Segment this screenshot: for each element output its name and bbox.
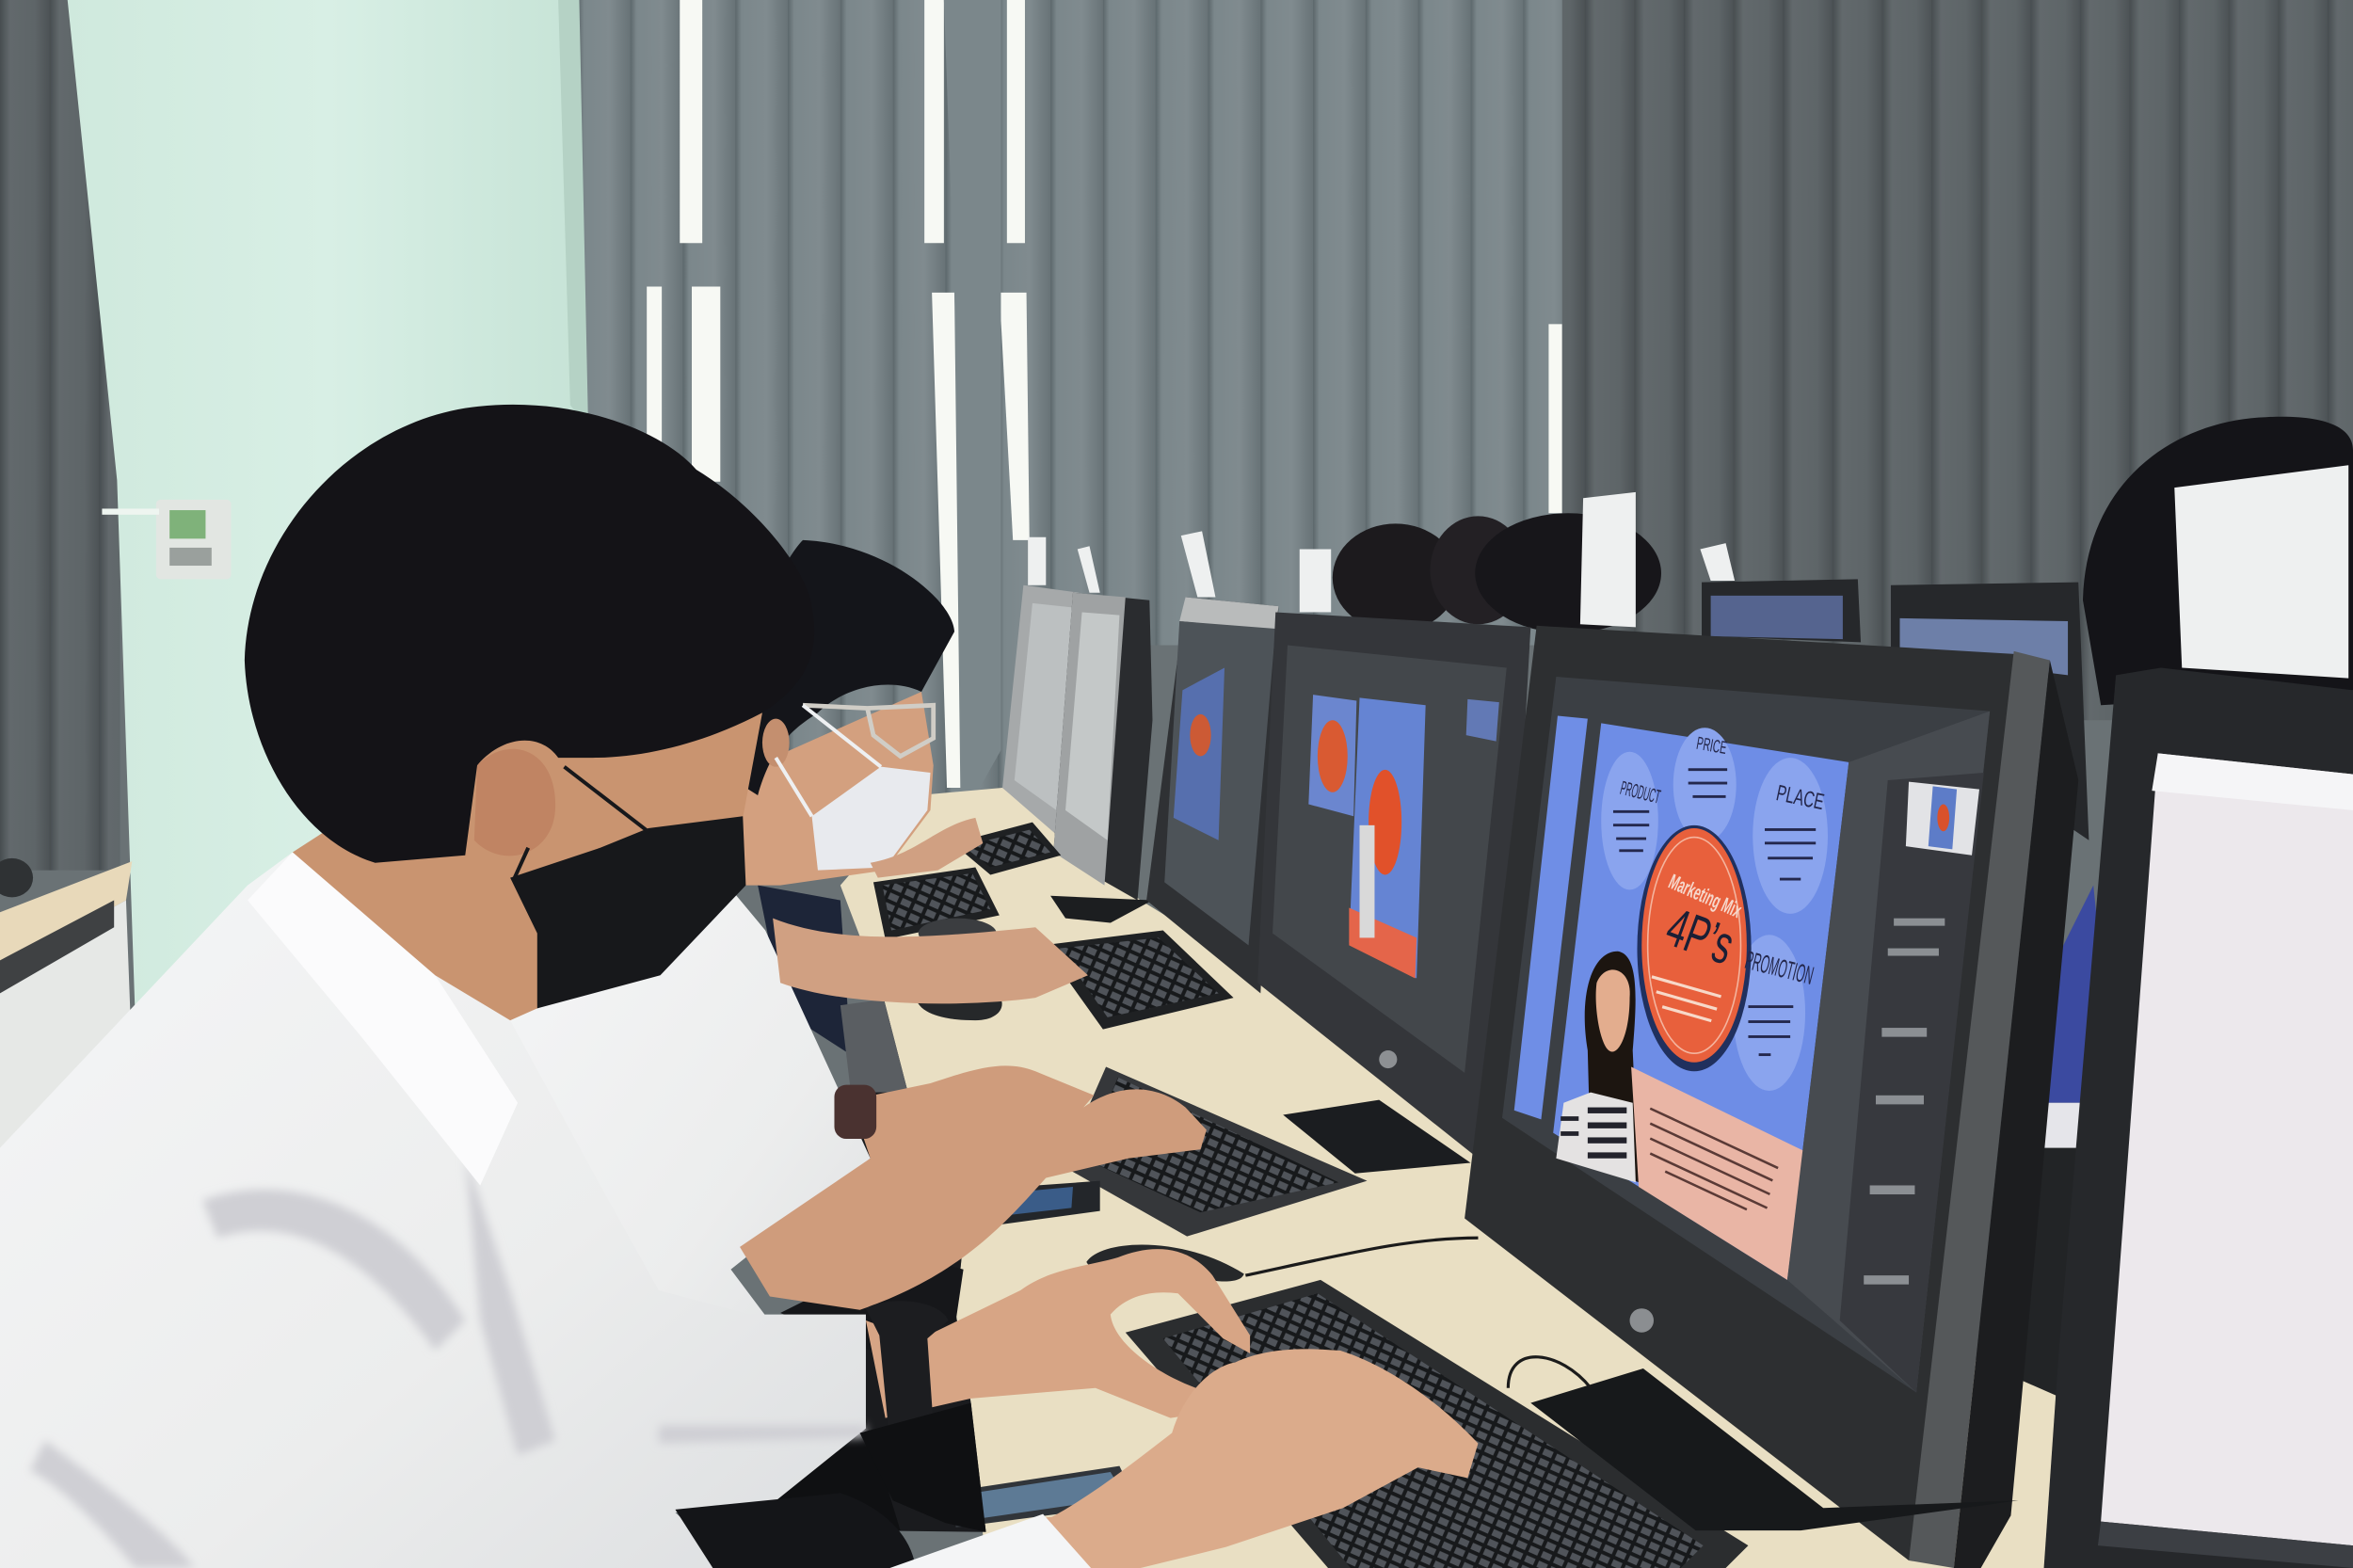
curtain slats: light group [578, 0, 1567, 795]
wall thermostat [156, 500, 232, 579]
window light strips [647, 0, 1562, 788]
cable loop [1508, 1357, 1591, 1388]
mouse: far [919, 919, 997, 949]
keyboard: far [952, 823, 1061, 874]
screen [1502, 677, 1990, 1392]
poster woman [1556, 952, 1639, 1182]
back monitors [1702, 579, 2089, 840]
HP logo [1630, 1308, 1654, 1333]
watch [866, 1301, 949, 1429]
page sliver [1514, 715, 1588, 1119]
black gap by chair [860, 1403, 986, 1532]
shirt [480, 886, 871, 1426]
dark panel below desk [851, 1000, 986, 1532]
right partial monitor [2044, 667, 2353, 1568]
mouse: front [1086, 1244, 1244, 1281]
collar [248, 853, 518, 1185]
monitor: third [1146, 598, 1278, 993]
wrist watch brown [834, 1085, 876, 1139]
shirt sleeve shadow [30, 1156, 866, 1568]
black mask [510, 816, 745, 1008]
panel: price circle: PRICE [1695, 734, 1728, 759]
arm and hands [740, 1065, 1207, 1310]
left grey curtain [0, 0, 120, 871]
hands on far keyboard [871, 818, 983, 878]
cable [1245, 1238, 1478, 1275]
poster peach text block [1631, 1067, 1803, 1280]
software side panel [1787, 712, 1990, 1392]
shirt cuff [889, 1514, 1091, 1568]
panel: price circle [1673, 728, 1737, 841]
black bag under arm [780, 1253, 964, 1351]
student in back: second student [480, 540, 1088, 1426]
poster centre circle: Marketing Mix [1665, 870, 1745, 922]
monitor: far 2 [1050, 593, 1152, 922]
ear [762, 719, 790, 767]
curtain slats: dark group [1562, 0, 2353, 720]
white mask [812, 767, 931, 871]
left side shelf [0, 858, 135, 1260]
silver bezel edge [1909, 651, 2050, 1568]
chair [675, 1493, 916, 1568]
white shirt [0, 853, 866, 1568]
back row people [1333, 417, 2353, 1403]
keyboard: front [1126, 1280, 1748, 1568]
mouse: third [916, 979, 1002, 1020]
forearm [773, 919, 1088, 1003]
neck and face [293, 712, 762, 1020]
arm: middle student hands [740, 1065, 1207, 1351]
phone on desk [990, 1181, 1100, 1226]
glasses [803, 705, 934, 757]
mask strap [513, 767, 649, 881]
poster centre circle: 4P’s [1658, 897, 1741, 977]
mask straps [776, 705, 881, 816]
paper cards on monitors [1028, 465, 2348, 679]
panel: promotion circle [1734, 935, 1805, 1091]
panel: place circle: PLACE [1774, 781, 1826, 815]
monitor: main front with Marketing Mix poster [1465, 626, 2078, 1568]
keyboard: third [1043, 930, 1234, 1030]
hair [245, 405, 814, 863]
promotion heading: PROMOTION [1742, 947, 1817, 990]
navy undershirt [758, 886, 851, 1055]
monitor: far 1 [1002, 585, 1079, 838]
hair [729, 540, 954, 795]
wide curtain slat [944, 0, 1000, 795]
left hand and wrist [866, 1249, 1250, 1418]
black tablet on desk [1283, 1100, 1470, 1174]
keyboard: second [1063, 1067, 1367, 1237]
poster background [1553, 723, 1849, 1280]
poster centre circle [1637, 825, 1752, 1071]
phone front [952, 1466, 1138, 1528]
ear [474, 749, 555, 856]
neck and face [729, 692, 934, 886]
front forearm and hand [901, 1349, 1478, 1568]
monitor body [1465, 626, 2018, 1560]
pale green wall [68, 0, 588, 1013]
student in front [0, 405, 1478, 1568]
panel: product circle: PRODUCT [1618, 778, 1662, 808]
keyboard: fourth [873, 867, 1000, 939]
panel: place circle [1753, 758, 1828, 914]
grey bag strip [840, 1000, 908, 1093]
black monitor side [1954, 660, 2078, 1568]
desk [840, 788, 2056, 1568]
panel: product circle [1601, 752, 1662, 889]
monitor: second with artwork [1257, 612, 1530, 1159]
monitor base front [1530, 1368, 2018, 1530]
dark area behind sleeve [750, 1418, 901, 1530]
